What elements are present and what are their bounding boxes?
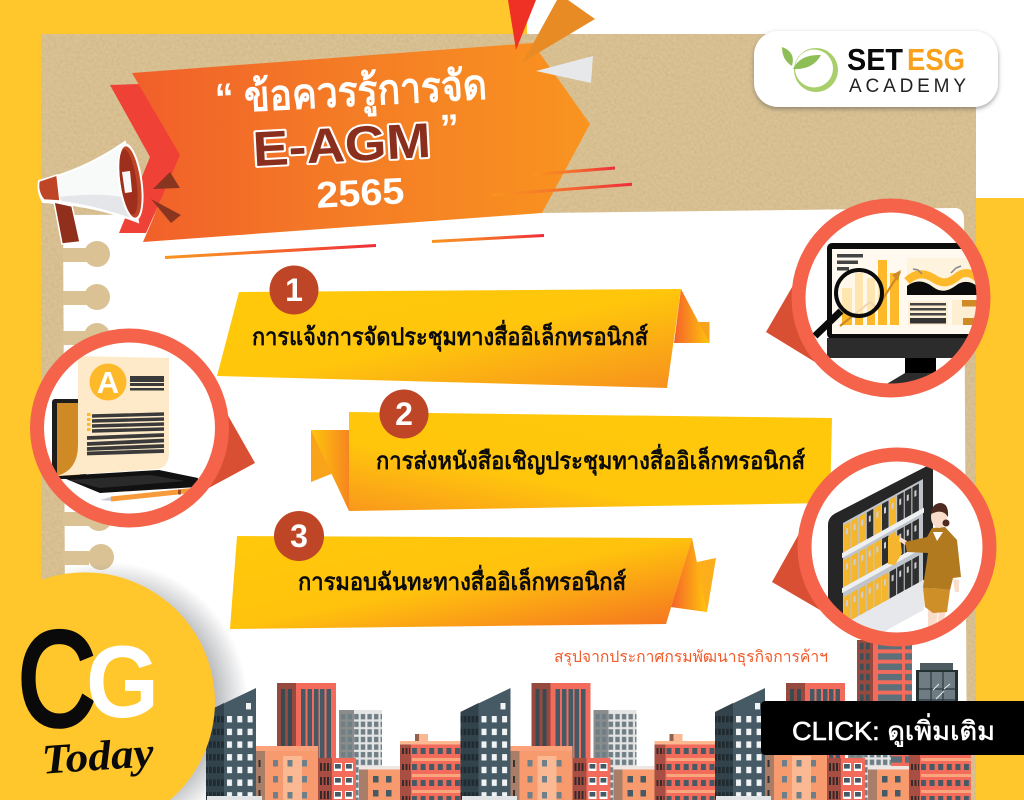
ribbon label: การส่งหนังสือเชิญประชุมทางสื่ออิเล็กทรอนิกส์ [376, 443, 805, 477]
badge script word: Today [40, 730, 156, 784]
number badge [270, 266, 318, 314]
number badge: 1 [285, 272, 303, 308]
ribbon fold [311, 430, 349, 511]
ribbon 2 [311, 390, 832, 511]
callout ring [798, 206, 984, 390]
ribbon fold [674, 289, 710, 343]
banner title text: ” [439, 107, 460, 150]
icon: megaphone [38, 142, 148, 244]
woman figure [899, 503, 961, 630]
callout pointer [766, 282, 815, 362]
yellow column: right [976, 198, 1024, 800]
callout: monitor with magnifier [766, 206, 997, 390]
folders row 2 [842, 516, 924, 593]
logo mark: leaf ring [782, 47, 838, 92]
banner accent lines [492, 168, 632, 195]
icon: megaphone sound bursts [151, 172, 181, 223]
badge letter C: C [18, 604, 95, 754]
shadow of CG Today badge [0, 560, 250, 800]
pulled-out folder [888, 535, 902, 565]
yellow frame: top and left [0, 0, 527, 620]
badge letter G: G [86, 624, 159, 739]
folders row 1 [842, 481, 924, 558]
banner front ribbon [132, 43, 590, 242]
click button [761, 701, 1024, 755]
callout ring [37, 336, 222, 520]
CG Today badge [0, 572, 215, 800]
ribbon body [230, 536, 692, 629]
ribbon 3 [230, 511, 716, 629]
ribbon body [217, 289, 681, 388]
click button: CLICK: ดูเพิ่มเติม [792, 713, 995, 747]
ribbon fold [671, 538, 707, 612]
ribbon 1 [217, 266, 710, 388]
monitor illustration [813, 243, 976, 384]
skyline: repeating city blocks [206, 683, 971, 800]
document illustration: A [97, 365, 119, 400]
title banner [110, 43, 632, 242]
ribbon back tail [311, 430, 349, 482]
number badge: 2 [395, 396, 413, 432]
banner title text: E-AGM [252, 114, 432, 177]
ribbon back tail [695, 322, 710, 343]
callout ring [804, 454, 990, 640]
filing shelf illustration [828, 466, 961, 632]
callout pointer [772, 532, 820, 610]
folders row 3 [844, 556, 924, 632]
ribbon label: การมอบฉันทะทางสื่ออิเล็กทรอนิกส์ [298, 564, 626, 596]
logo text: SET [847, 42, 903, 77]
ribbon label: การแจ้งการจัดประชุมทางสื่ออิเล็กทรอนิกส์ [252, 319, 648, 353]
notebook paper with ring tabs [63, 208, 967, 800]
number badge: 3 [290, 518, 308, 554]
skyline: back towers [857, 640, 958, 800]
logo card: SET ESG Academy: ACADEMY [849, 76, 966, 97]
logo card: SET ESG Academy [754, 31, 998, 107]
underline strokes below banner [165, 236, 544, 258]
document illustration [52, 356, 200, 501]
callout: woman at digital file shelf [772, 454, 990, 655]
banner title text: “ ข้อควรรู้การจัด [214, 61, 488, 125]
ribbon back tail [671, 558, 716, 612]
decorative triangles at top [508, 0, 595, 83]
callout pointer [205, 412, 255, 490]
banner back ribbon [110, 84, 181, 233]
logo card: SET ESG Academy: ESG [907, 42, 965, 77]
number badge [274, 511, 324, 561]
number badge [380, 390, 428, 438]
ribbon body [349, 412, 832, 511]
source note: สรุปจากประกาศกรมพัฒนาธุรกิจการค้าฯ [554, 648, 828, 667]
banner title text: 2565 [315, 170, 405, 216]
callout: laptop and document [37, 336, 255, 520]
banner title text [214, 61, 493, 221]
